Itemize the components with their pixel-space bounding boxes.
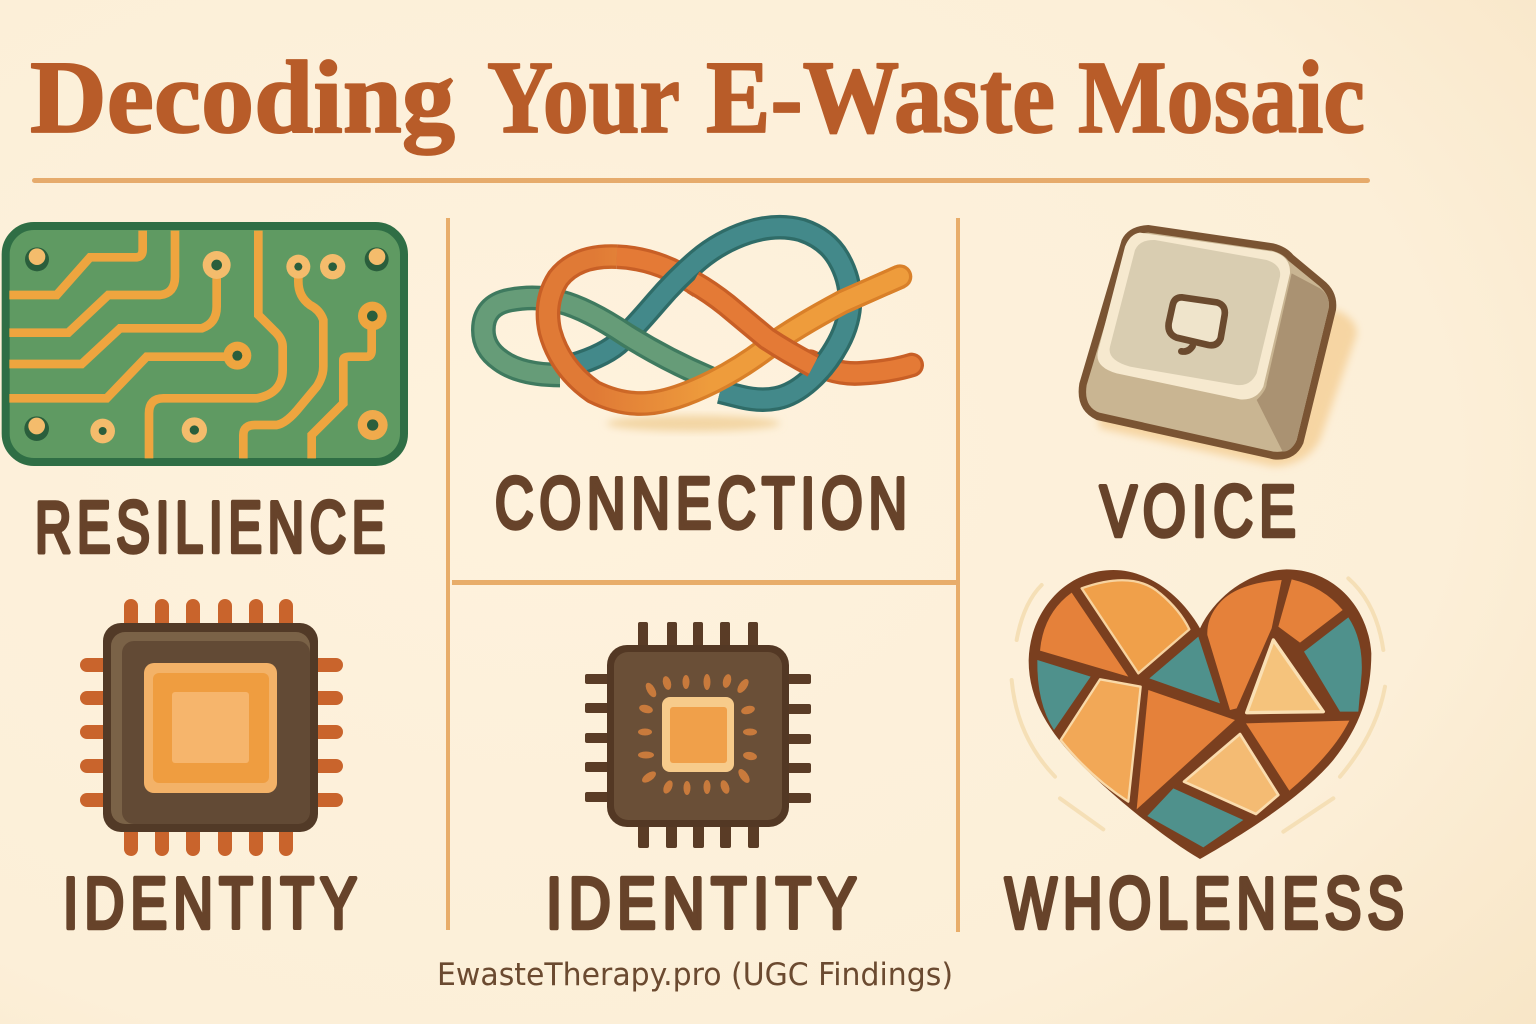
title rule <box>32 178 1370 183</box>
panel: voice <box>1079 225 1357 552</box>
label: identity: IDENTITY <box>63 864 363 944</box>
footer source credit: EwasteTherapy.pro (UGC Findings) <box>437 957 953 993</box>
title: E-Waste <box>706 40 1055 155</box>
panel: connection <box>483 227 913 544</box>
core glow rays <box>638 673 758 795</box>
panel: resilience <box>6 226 404 568</box>
icon: microchip with glowing core <box>585 622 811 848</box>
icon: mosaic heart <box>1012 569 1385 859</box>
title <box>30 40 1365 155</box>
label: connection: CONNECTION <box>495 464 913 544</box>
title: Your <box>487 40 680 155</box>
label: identity: IDENTITY <box>546 864 863 944</box>
title: Decoding <box>30 40 455 155</box>
panel: identity center <box>546 622 863 944</box>
icon: microchip with plain core <box>80 599 343 856</box>
panel: identity left <box>63 599 363 944</box>
icon: knotted cables <box>483 227 912 431</box>
label: wholeness: WHOLENESS <box>1005 864 1410 944</box>
icon: circuit board <box>6 226 404 462</box>
title: Mosaic <box>1078 40 1365 155</box>
icon: keyboard key <box>1079 225 1357 467</box>
panel: wholeness <box>1005 569 1410 944</box>
label: voice: VOICE <box>1100 472 1302 552</box>
label: resilience: RESILIENCE <box>35 488 391 568</box>
grid dividers <box>446 218 960 932</box>
